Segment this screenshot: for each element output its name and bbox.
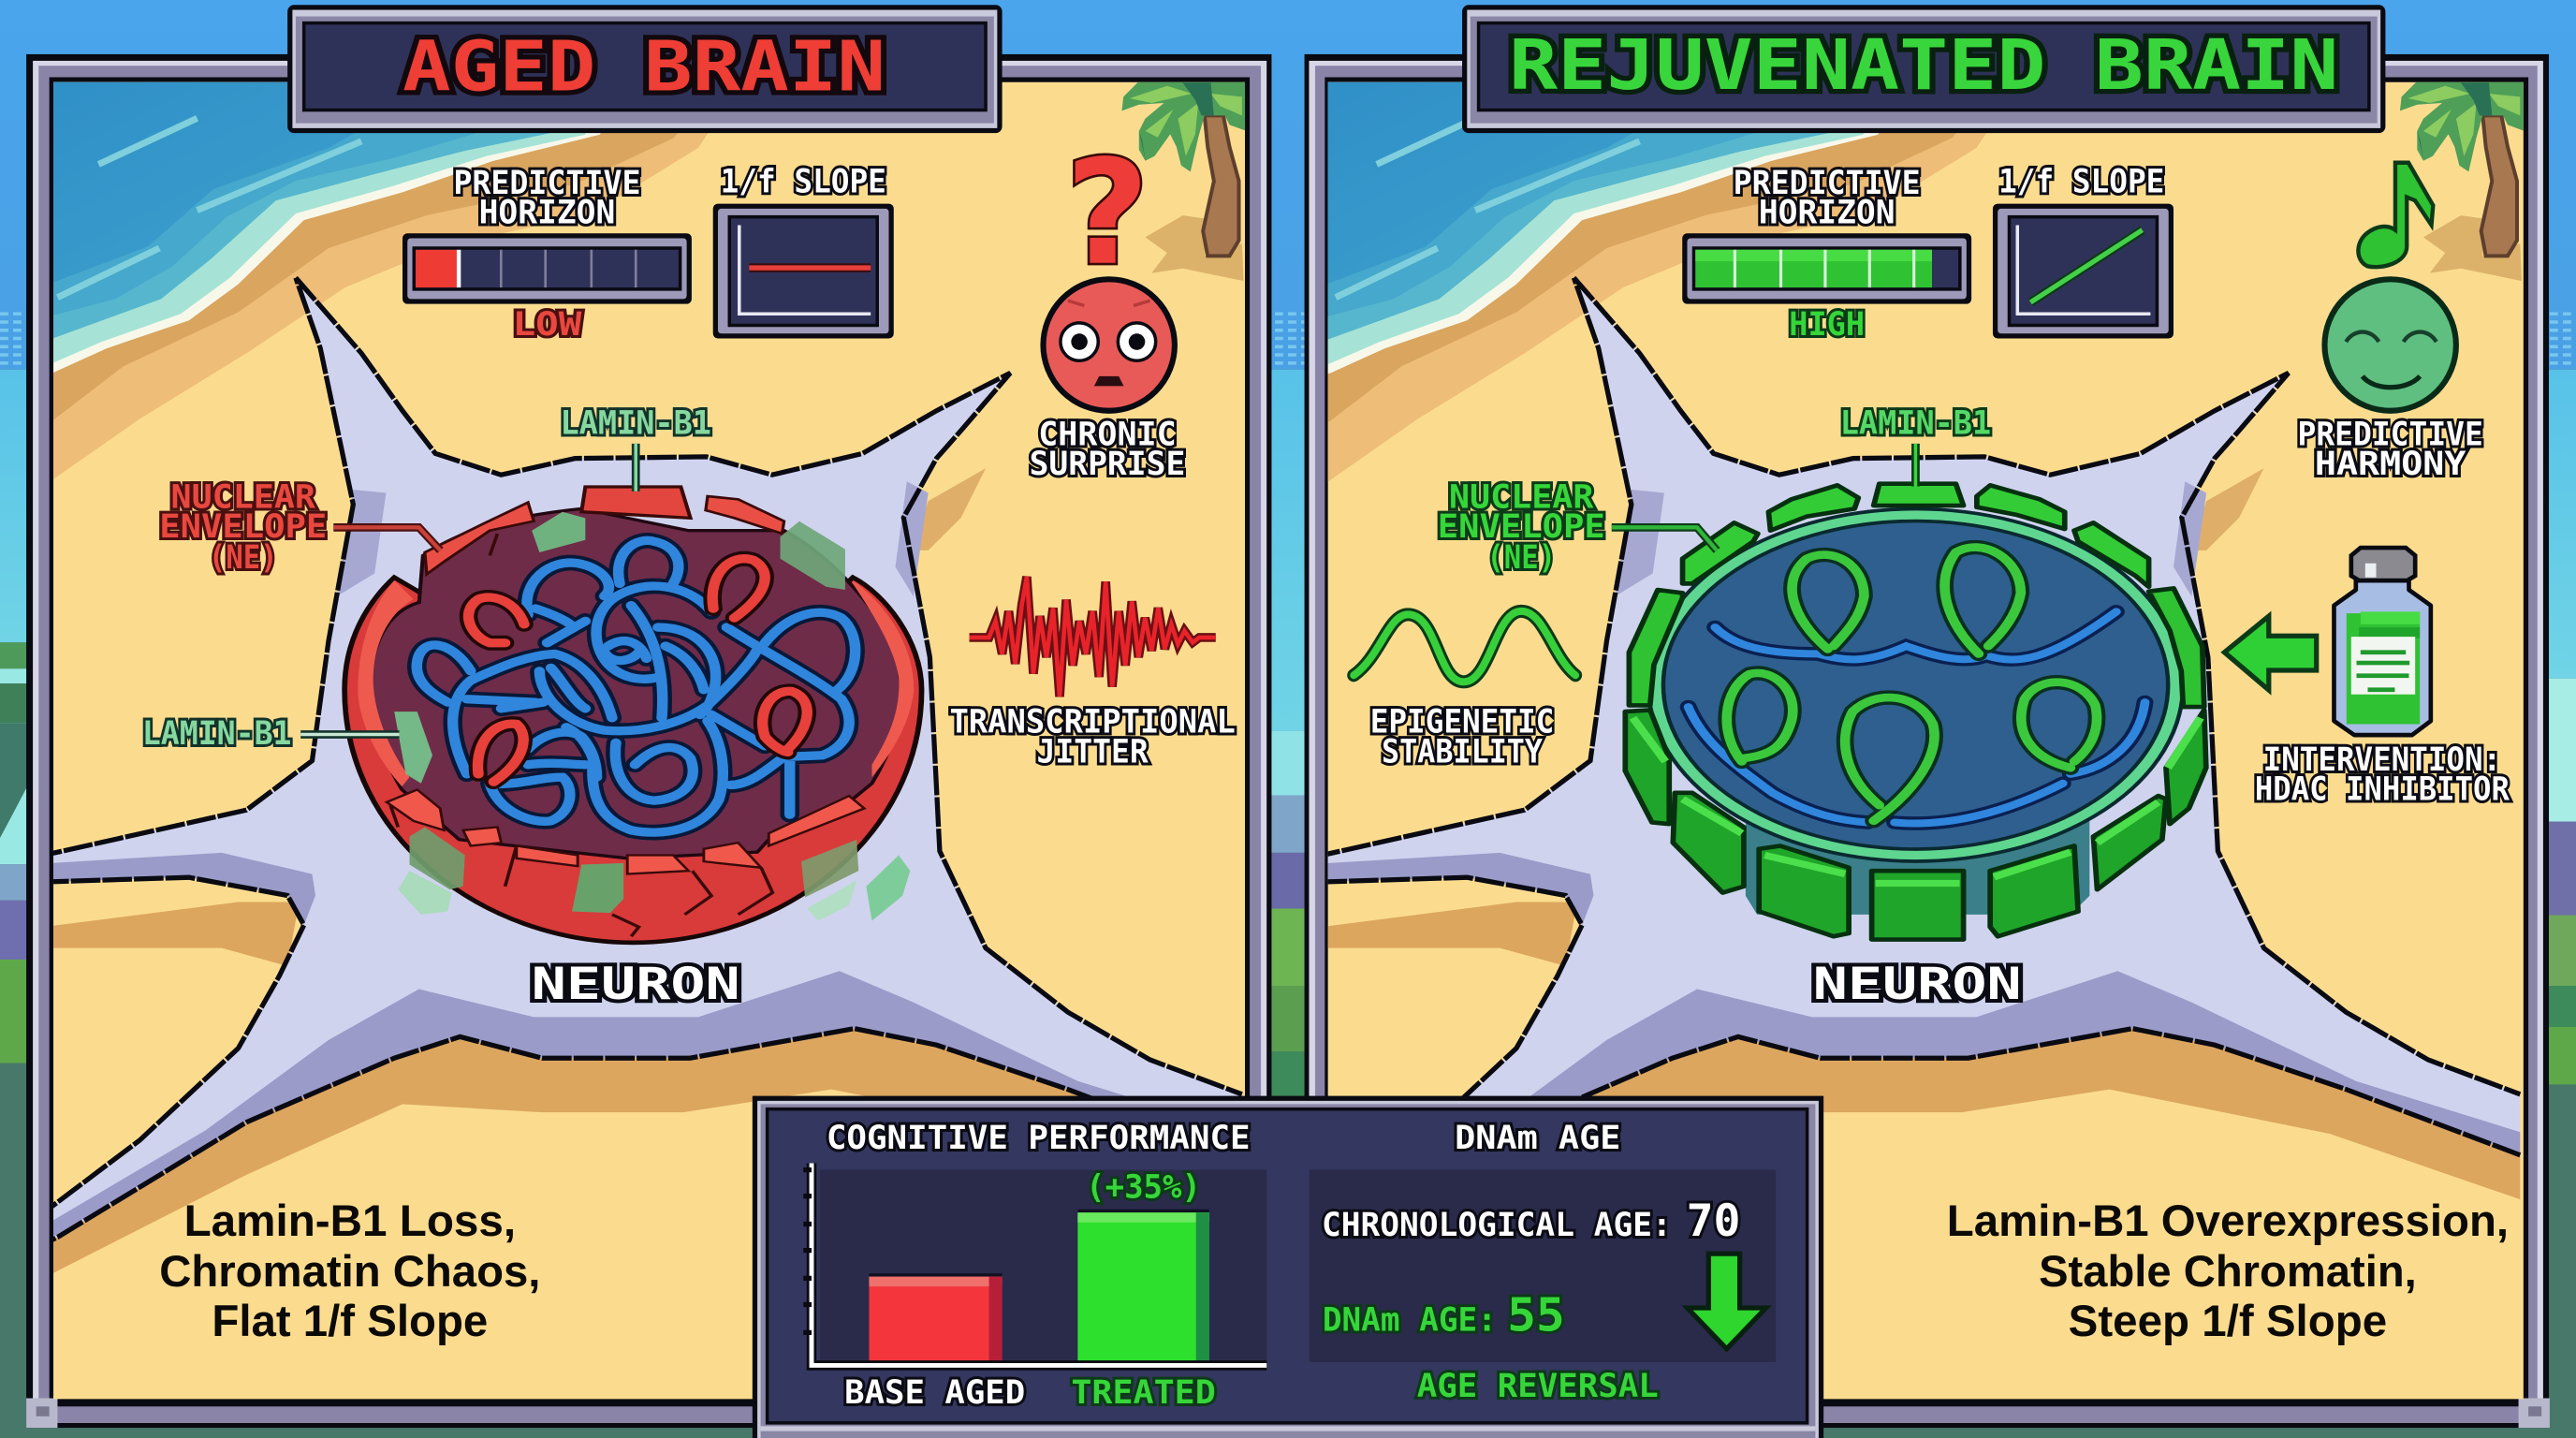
label: lamin-B1 left: LAMIN-B1 <box>142 714 292 753</box>
predictive horizon gauge: PREDICTIVE <box>453 164 640 202</box>
label: intervention: INTERVENTION: <box>2263 741 2501 779</box>
title banner: aged brain <box>287 5 1003 133</box>
arrow: age decrease <box>1687 1254 1766 1349</box>
bar: base aged <box>869 1273 1003 1364</box>
panel: rejuvenated brain <box>1305 5 2559 1430</box>
icon: smiling face <box>2324 279 2456 411</box>
stat block: DNAm age: 70 <box>1687 1196 1741 1247</box>
1/f slope chart: steep <box>1993 162 2174 339</box>
label: nuclear envelope: NUCLEAR <box>1449 477 1594 516</box>
label: transcriptional jitter: JITTER <box>1036 732 1149 770</box>
arrow: intervention into nucleus <box>2224 616 2317 690</box>
label: neuron: NEURON <box>1813 959 2022 1010</box>
label: epigenetic stability: STABILITY <box>1382 732 1543 770</box>
healthy nucleus <box>1625 484 2206 940</box>
label: predictive harmony: PREDICTIVE <box>2298 416 2483 454</box>
1/f slope chart: steep: 1/f SLOPE <box>1998 162 2164 200</box>
panel: results dashboard <box>753 1096 1823 1438</box>
predictive horizon gauge: HORIZON <box>1759 194 1895 232</box>
label: nuclear envelope: (NE) <box>209 538 278 577</box>
label: transcriptional jitter: TRANSCRIPTIONAL <box>949 703 1236 741</box>
predictive horizon gauge: HIGH <box>1789 305 1865 344</box>
1/f slope chart: flat: 1/f SLOPE <box>721 162 886 200</box>
beach scene with neuron <box>1311 66 2559 1430</box>
caption: rejuvenated summary <box>1947 1196 2509 1346</box>
panel frame <box>26 54 1271 1428</box>
label: intervention <box>2255 741 2510 809</box>
predictive horizon gauge <box>402 164 692 344</box>
label: lamin-B1 top: LAMIN-B1 <box>560 404 711 442</box>
caption: aged summary <box>159 1196 540 1346</box>
label: predictive harmony <box>2298 416 2483 483</box>
ordered chromatin <box>1689 548 2145 823</box>
title banner: aged brain: AGED BRAIN <box>402 28 886 108</box>
label: nuclear envelope: (NE) <box>1486 538 1556 577</box>
predictive horizon gauge: PREDICTIVE <box>1734 164 1921 202</box>
title banner: rejuvenated brain <box>1462 5 2385 133</box>
caption: rejuvenated summary: Stable Chromatin, <box>2039 1247 2417 1297</box>
label: chronic surprise <box>1030 416 1185 483</box>
beach scene with neuron <box>33 66 1281 1430</box>
stat block: DNAm age: DNAm AGE <box>1455 1119 1620 1157</box>
stat block: DNAm age <box>1310 1119 1776 1405</box>
bar: treated <box>1077 1210 1209 1364</box>
predictive horizon gauge: LOW <box>513 305 582 344</box>
bar chart: cognitive performance <box>803 1119 1266 1412</box>
panel: aged brain <box>26 5 1281 1430</box>
label: epigenetic stability: EPIGENETIC <box>1370 703 1554 741</box>
label: predictive harmony: HARMONY <box>2315 445 2466 483</box>
bar chart: cognitive performance: TREATED <box>1071 1373 1216 1412</box>
stat block: DNAm age: DNAm AGE: <box>1323 1301 1497 1340</box>
panel frame <box>1305 54 2550 1428</box>
label: nuclear envelope <box>1438 477 1717 577</box>
predictive horizon gauge: HORIZON <box>479 194 615 232</box>
predictive horizon gauge <box>1682 164 1971 344</box>
icon: medicine vial <box>2334 548 2431 735</box>
caption: aged summary: Flat 1/f Slope <box>212 1297 488 1346</box>
1/f slope chart: flat <box>713 162 894 339</box>
label: intervention: HDAC INHIBITOR <box>2255 770 2510 809</box>
caption: aged summary: Lamin-B1 Loss, <box>184 1196 516 1246</box>
dashboard frame <box>753 1096 1823 1438</box>
caption: rejuvenated summary: Steep 1/f Slope <box>2069 1297 2387 1346</box>
lamin-B1 fragments <box>394 512 910 921</box>
bar chart: cognitive performance: COGNITIVE PERFORMANCE <box>827 1119 1251 1157</box>
caption: rejuvenated summary: Lamin-B1 Overexpression, <box>1947 1196 2509 1246</box>
label: chronic surprise: SURPRISE <box>1030 445 1185 483</box>
icon: jitter waveform <box>970 577 1216 697</box>
lamin-B1 blocks <box>1625 484 2206 940</box>
label: lamin-B1 top: LAMIN-B1 <box>1840 404 1991 442</box>
caption: aged summary: Chromatin Chaos, <box>159 1247 540 1297</box>
chart axes <box>812 1164 1266 1365</box>
label: chronic surprise: CHRONIC <box>1038 416 1177 454</box>
aged nucleus <box>344 487 922 943</box>
icon: stable sine wave <box>1354 611 1575 682</box>
label: epigenetic stability <box>1370 703 1554 770</box>
label: nuclear envelope: NUCLEAR <box>171 477 316 516</box>
icon: music note <box>2358 163 2433 267</box>
bar chart: cognitive performance: (+35%) <box>1086 1167 1201 1206</box>
title banner: rejuvenated brain: REJUVENATED BRAIN <box>1509 26 2338 106</box>
label: nuclear envelope: ENVELOPE <box>159 507 327 546</box>
tangled chromatin <box>417 540 856 832</box>
icon: question mark: ? <box>1065 130 1149 298</box>
icon: surprised face <box>1043 279 1175 411</box>
bar chart: cognitive performance: BASE AGED <box>844 1373 1025 1412</box>
label: nuclear envelope: ENVELOPE <box>1438 507 1605 546</box>
label: transcriptional jitter <box>949 703 1236 770</box>
stat block: DNAm age: CHRONOLOGICAL AGE: <box>1322 1206 1672 1244</box>
label: neuron: NEURON <box>532 959 740 1010</box>
stat block: DNAm age: AGE REVERSAL <box>1417 1367 1659 1405</box>
label: nuclear envelope <box>159 477 440 577</box>
stat block: DNAm age: 55 <box>1507 1288 1565 1343</box>
